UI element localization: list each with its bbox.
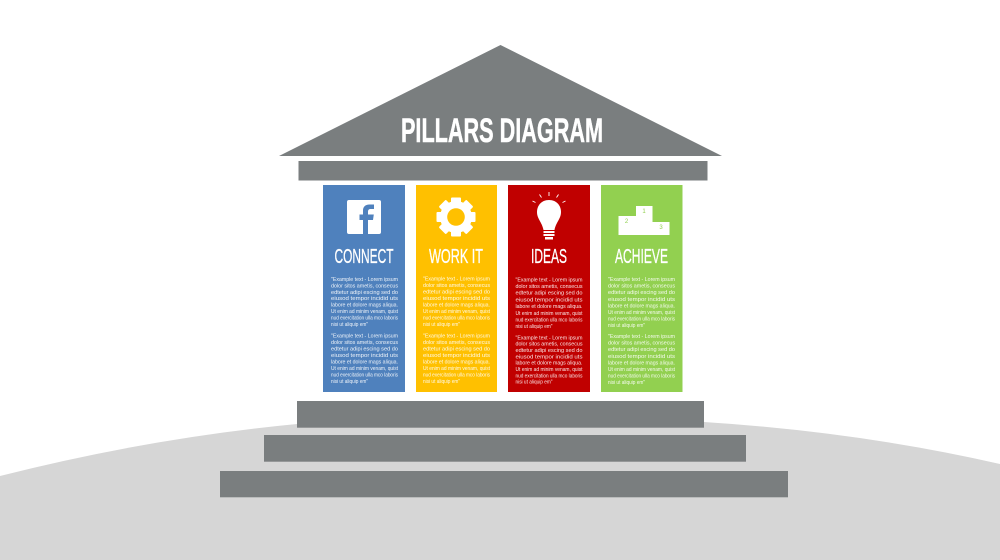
achieve heading: ACHIEVE [615, 246, 668, 268]
icon: podium: 2 [625, 219, 629, 225]
work it text: "Example text - Lorem ipsum [423, 276, 490, 282]
icon: podium: 1 [642, 209, 646, 215]
connect heading: CONNECT [334, 246, 394, 268]
work it text: dolor sitos ametis, consecus [423, 283, 490, 289]
connect text: edtetur adipi escing sed do [331, 290, 398, 296]
ideas text: labore et dolore mags aliqua. [516, 361, 582, 367]
achieve text: nud exercitation ulla mco laboris [608, 374, 675, 380]
achieve text: Ut enim ad minim venam, quist [608, 367, 675, 373]
work it text: nud exercitation ulla mco laboris [423, 372, 490, 378]
connect text: "Example text - Lorem ipsum [331, 277, 398, 283]
roof beam [298, 161, 708, 180]
work it text [423, 276, 490, 385]
icon: podium [618, 206, 670, 235]
ideas text: eiusod tempor incidid uts [516, 297, 583, 303]
icon: podium: 3 [659, 225, 663, 231]
achieve text: nisi ut aliquip em" [608, 380, 645, 386]
ideas text: labore et dolore mags aliqua. [516, 304, 582, 310]
ideas text: edtetur adipi escing sed do [516, 291, 582, 297]
connect text: labore et dolore mags aliqua. [331, 303, 398, 309]
work it text: nud exercitation ulla mco laboris [423, 315, 490, 321]
work it text: eiusod tempor incidid uts [423, 296, 490, 302]
ideas text: Ut enim ad minim venam, quist [516, 367, 583, 373]
achieve text: Ut enim ad minim venam, quist [608, 310, 675, 316]
connect text: nud exercitation ulla mco laboris [331, 315, 398, 321]
work it panel [416, 185, 497, 392]
connect text: nud exercitation ulla mco laboris [331, 372, 398, 378]
achieve text: dolor sitos ametis, consecus [608, 284, 675, 290]
ideas panel [508, 185, 590, 392]
icon: gear [436, 198, 476, 236]
work it text: nisi ut aliquip em" [423, 322, 460, 328]
connect text: edtetur adipi escing sed do [331, 346, 398, 352]
work it text: edtetur adipi escing sed do [423, 346, 490, 352]
work it text: nisi ut aliquip em" [423, 379, 460, 385]
connect text: dolor sitos ametis, consecus [331, 340, 398, 346]
achieve text: "Example text - Lorem ipsum [608, 334, 675, 340]
ideas text: nisi ut aliquip em" [516, 380, 553, 386]
work it text: dolor sitos ametis, consecus [423, 340, 490, 346]
steps: bottom [220, 471, 788, 497]
icon: light bulb [532, 192, 566, 240]
achieve text: "Example text - Lorem ipsum [608, 277, 675, 283]
ideas text: dolor sitos ametis, consecus [516, 284, 583, 290]
steps: middle [264, 435, 746, 462]
icon: facebook [347, 200, 381, 234]
achieve text: nud exercitation ulla mco laboris [608, 317, 675, 323]
connect text: Ut enim ad minim venam, quist [331, 309, 398, 315]
ideas text: nud exercitation ulla mco laboris [516, 318, 583, 324]
ideas text: Ut enim ad minim venam, quist [516, 311, 583, 317]
ground hill [0, 415, 1000, 560]
achieve text: labore et dolore mags aliqua. [608, 303, 675, 309]
work it text: labore et dolore mags aliqua. [423, 302, 490, 308]
achieve text: labore et dolore mags aliqua. [608, 360, 675, 366]
steps: top [297, 401, 704, 428]
ideas text: nisi ut aliquip em" [516, 324, 553, 330]
connect text: nisi ut aliquip em" [331, 322, 368, 328]
pillar: achieve [601, 185, 682, 392]
roof pediment [279, 45, 722, 156]
ideas text: dolor sitos ametis, consecus [516, 342, 583, 348]
achieve text: nisi ut aliquip em" [608, 323, 645, 329]
ideas text: "Example text - Lorem ipsum [516, 335, 583, 341]
achieve panel [601, 185, 682, 392]
work it text: labore et dolore mags aliqua. [423, 360, 490, 366]
achieve text: eiusod tempor incidid uts [608, 297, 675, 303]
work it text: Ut enim ad minim venam, quist [423, 309, 490, 315]
connect text: "Example text - Lorem ipsum [331, 334, 398, 340]
connect text: eiusod tempor incidid uts [331, 353, 398, 359]
work it text: "Example text - Lorem ipsum [423, 334, 490, 340]
title: PILLARS DIAGRAM [401, 112, 603, 150]
achieve text: dolor sitos ametis, consecus [608, 341, 675, 347]
connect text: dolor sitos ametis, consecus [331, 283, 398, 289]
pillar: connect [323, 185, 405, 392]
connect text: labore et dolore mags aliqua. [331, 360, 398, 366]
achieve text: eiusod tempor incidid uts [608, 354, 675, 360]
ideas text: eiusod tempor incidid uts [516, 354, 583, 360]
ideas text: nud exercitation ulla mco laboris [516, 373, 583, 379]
connect text [331, 277, 398, 385]
connect panel [323, 185, 405, 392]
pillar: work it [416, 185, 497, 392]
ideas text [516, 277, 583, 386]
ideas text: edtetur adipi escing sed do [516, 348, 582, 354]
connect text: nisi ut aliquip em" [331, 379, 368, 385]
achieve text: edtetur adipi escing sed do [608, 290, 675, 296]
ideas heading: IDEAS [531, 246, 567, 268]
pillar: ideas [508, 185, 590, 392]
work it text: eiusod tempor incidid uts [423, 353, 490, 359]
connect text: eiusod tempor incidid uts [331, 296, 398, 302]
ideas text: "Example text - Lorem ipsum [516, 277, 583, 283]
work it text: Ut enim ad minim venam, quist [423, 366, 490, 372]
connect text: Ut enim ad minim venam, quist [331, 366, 398, 372]
work it text: edtetur adipi escing sed do [423, 289, 490, 295]
work it heading: WORK IT [429, 246, 483, 268]
achieve text: edtetur adipi escing sed do [608, 347, 675, 353]
achieve text [608, 277, 675, 386]
